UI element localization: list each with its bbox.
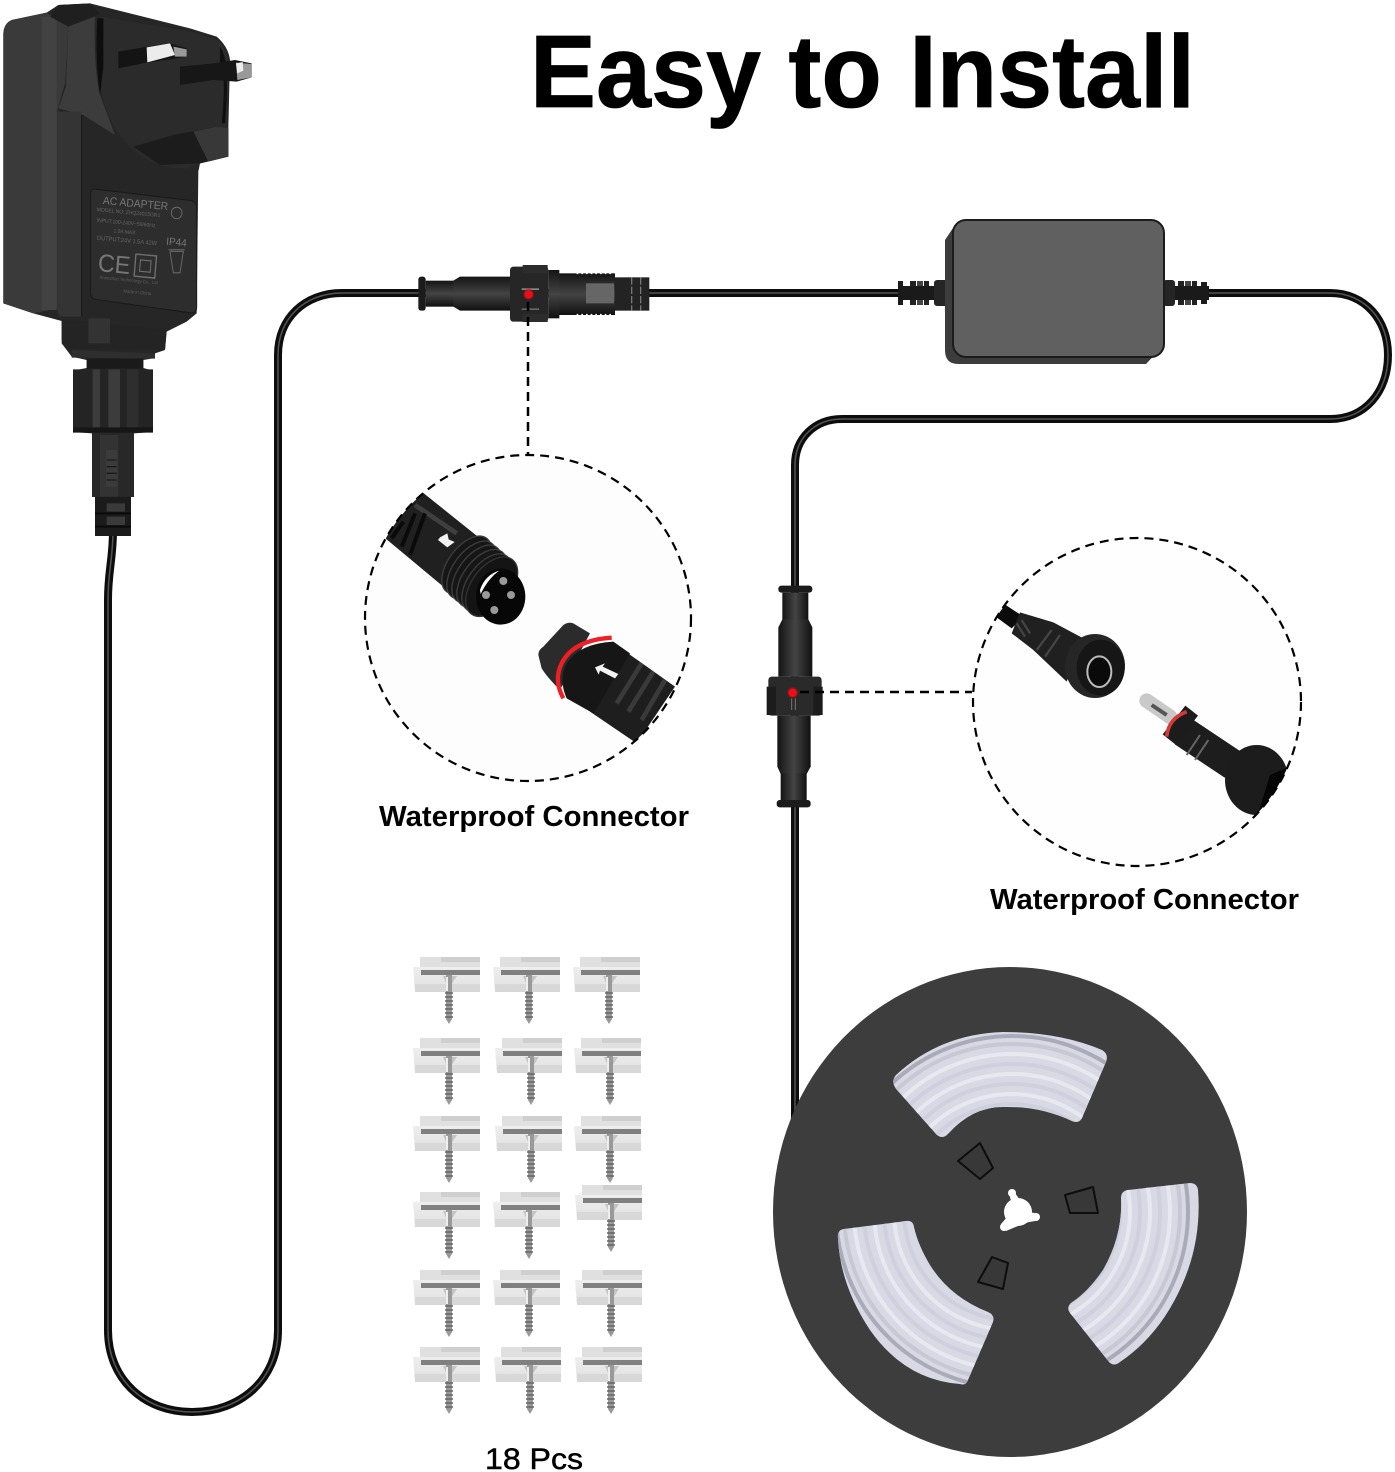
DC male plug [1147,701,1293,822]
reel hub [1000,1189,1040,1231]
label: right connector: Waterproof Connector [990,884,1299,916]
title: Easy to Install [530,14,1195,129]
DC female socket [993,603,1125,698]
right strain relief [1163,280,1209,306]
adapter base and gland nut [62,318,167,536]
female red-ring plug [538,623,675,743]
dashed ring [365,455,691,781]
red marker [523,289,534,300]
UK plug pins [118,43,187,68]
control box [898,220,1209,364]
left strain relief [898,280,952,306]
inset: DC barrel connector [973,538,1301,866]
adapter rating plate: 1.0A MAX [113,228,136,237]
red marker [787,687,798,698]
adapter rating plate: MODEL NO: ZHQ24015GR1 [96,207,161,219]
label: left connector: Waterproof Connector [379,801,689,833]
adapter rating plate: Made in China [123,288,152,296]
adapter silhouette [3,3,230,536]
adapter side face [3,13,68,313]
inset: four-pin connector [365,455,691,781]
adapter rating plate: OUTPUT:24V 1.5A 42W [96,236,158,247]
dashed ring [973,538,1301,866]
adapter rating plate [91,189,197,313]
leader line to right inset [800,691,972,693]
vertical inline waterproof connector [767,586,823,807]
power and signal cable run [108,293,1388,1412]
power adapter [3,3,252,536]
reel slots [958,1143,1098,1289]
plug face [99,17,228,168]
LED strip reel [773,967,1247,1457]
adapter rating plate: AC ADAPTER [102,195,169,213]
adapter rating plate: Shenzhen Technology Co., Ltd [99,275,159,285]
adapter rating plate: IP44 [166,236,187,250]
box shell [945,225,1164,364]
adapter rating plate: INPUT:100-240V~50/60Hz [96,218,156,229]
box face [953,220,1164,357]
mounting clips grid [413,957,642,1414]
knurled grip [586,283,614,303]
male threaded plug [383,492,528,626]
LED strip windows [838,1032,1199,1384]
adapter rating plate: CE [97,249,131,280]
reel disc [773,967,1247,1457]
leader line to left inset [527,302,529,456]
adapter front strip [57,110,82,317]
top inline waterproof connector [418,265,649,322]
